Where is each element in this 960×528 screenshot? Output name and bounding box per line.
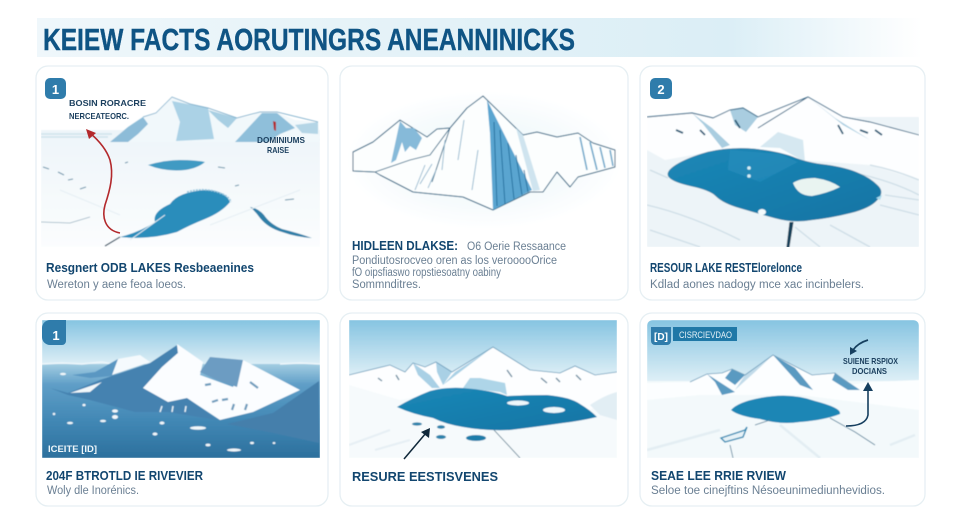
panel: resure estimates	[340, 313, 628, 506]
title: KEIEW FACTS AORUTINGRS ANEANNINICKS	[43, 22, 575, 57]
panel: sea level review	[640, 313, 925, 506]
illustration: sea level lake	[647, 320, 919, 458]
annotation: top right: DOCIANS	[852, 366, 887, 376]
description: fO oipsfiaswo ropstiesoatny oabiny	[352, 267, 501, 279]
arrow: red flow arrow	[86, 129, 120, 233]
illustration: ice sheet with lakes	[41, 97, 320, 247]
arrow: curved pointer top	[850, 340, 868, 355]
arrow: black pointer	[404, 428, 430, 459]
description: Woly dle Inorénics.	[47, 485, 139, 497]
annotation: top right: SUIENE RSPIOX	[843, 356, 898, 366]
illustration: crater lake	[647, 97, 919, 247]
panel: hidden lakes	[340, 66, 628, 300]
panel: icebergs view	[36, 313, 328, 506]
description: Sommnditres.	[352, 279, 421, 291]
illustration: mountain section	[344, 90, 624, 230]
description	[352, 255, 557, 291]
badge: number 1: 1	[52, 328, 60, 343]
badge: number 1	[45, 78, 66, 99]
label: image tag: CISRCIEVDAO	[679, 330, 732, 340]
heading: O6 Oerie Ressaance	[467, 241, 566, 253]
annotation: top right: DOMINIUMS	[257, 135, 305, 145]
arrow: rising pointer	[846, 382, 873, 426]
description: Kdlad aones nadogy mce xac incinbelers.	[650, 279, 864, 291]
image caption: ICEITE [ID]	[48, 444, 97, 454]
illustration: glacier in sea	[42, 320, 320, 458]
heading	[352, 238, 566, 253]
badge: icon number: [D]	[654, 332, 668, 343]
heading: Resgnert ODB LAKES Resbeaenines	[46, 260, 254, 275]
label: image tag	[673, 327, 737, 341]
badge: number 2: 2	[657, 82, 665, 97]
heading: RESURE EESTISVENES	[352, 469, 498, 484]
annotation: top left: BOSIN RORACRE	[69, 98, 146, 108]
badge: number 1: 1	[52, 82, 59, 97]
badge: number 2	[650, 78, 672, 99]
description: Seloe toe cinejftins Nésoeunimediunhevidios.	[651, 485, 885, 497]
description: Pondiutosrocveo oren as los verooooOrice	[352, 255, 557, 267]
panel: resurgent lakes	[36, 66, 328, 300]
description: Wereton y aene feoa loeos.	[47, 279, 186, 291]
annotation: top left: NERCEATEORC.	[69, 111, 129, 121]
heading: HIDLEEN DLAKSE:	[352, 238, 458, 253]
annotation: top right: RAISE	[267, 145, 289, 155]
title band	[37, 18, 922, 57]
badge: icon number	[651, 327, 671, 345]
heading: 204F BTROTLD IE RIVEVIER	[46, 468, 204, 483]
annotation: top right	[843, 356, 898, 376]
badge: number 1	[42, 320, 66, 345]
heading: SEAE LEE RRIE RVIEW	[651, 468, 787, 483]
heading: RESOUR LAKE RESTElorelonce	[650, 260, 802, 275]
annotation: top left	[69, 98, 146, 121]
illustration: mountain lake	[349, 320, 617, 458]
annotation: top right	[257, 135, 305, 155]
panel: resource lake	[640, 66, 925, 300]
